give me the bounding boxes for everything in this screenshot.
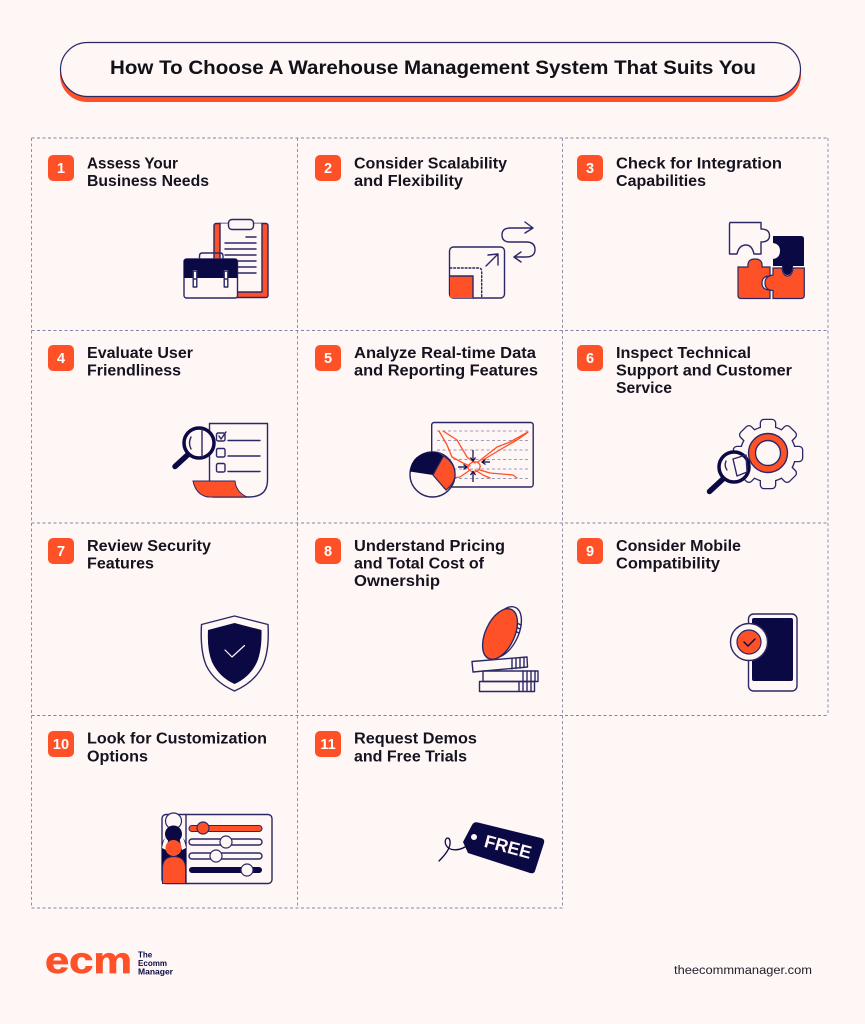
heading 6: Support and Customer [616,362,792,380]
heading 7: Features [87,556,154,572]
badge 3: 3 [586,161,594,177]
heading 5: and Reporting Features [354,362,538,380]
logo: the ecomm manager: Ecomm [138,959,167,968]
badge 7 [48,538,74,564]
icon: coin on books [472,601,538,692]
badge 9: 9 [586,544,594,560]
panel 3: check for integration capabilities [577,155,804,298]
heading 2: and Flexibility [354,173,463,190]
heading 5 [354,345,538,380]
panel 4: evaluate user friendliness [48,345,268,497]
panel 2: consider scalability and flexibility [315,155,535,298]
badge 8 [315,538,341,564]
heading 6: Service [616,380,672,397]
heading 6: Inspect Technical [616,345,751,362]
badge 6: 6 [586,351,594,367]
icon: sliders and user profiles [162,813,272,884]
heading 2: Consider Scalability [354,156,507,172]
badge 6 [577,345,603,371]
heading 10: Options [87,748,148,766]
badge 11 [315,731,341,757]
heading 6 [616,345,792,397]
badge 9 [577,538,603,564]
heading 8 [354,538,505,590]
icon: clipboard and briefcase [184,220,268,298]
badge 1 [48,155,74,181]
badge 7: 7 [57,544,65,560]
badge 5 [315,345,341,371]
panel 10: look for customization options [48,730,272,884]
heading 4: Friendliness [87,362,181,380]
heading 4: Evaluate User [87,345,193,362]
badge 5: 5 [324,351,332,367]
logo: the ecomm manager [45,940,173,981]
heading 5: Analyze Real-time Data [354,345,536,362]
title banner [60,42,801,102]
heading 11: and Free Trials [354,748,467,766]
heading 9 [616,538,741,572]
panel 9: consider mobile compatibility [577,538,797,691]
heading 4 [87,345,193,380]
heading 1: Business Needs [87,173,209,190]
badge 10: 10 [53,737,69,753]
panel 8: understand pricing [315,538,538,692]
badge 4 [48,345,74,371]
heading 1: Assess Your [87,156,178,172]
icon: free price tag [439,822,544,873]
title banner: How To Choose A Warehouse Management System That Suits You [110,57,756,79]
icon: gear with magnifier [710,420,802,492]
logo: the ecomm manager: ecm [45,940,132,981]
badge 2: 2 [324,161,332,177]
heading 3 [616,156,782,190]
heading 8: and Total Cost of [354,556,485,572]
panel 11: request demos and free trials [315,730,544,873]
heading 8: Understand Pricing [354,538,505,555]
icon: phone with check [730,614,797,691]
heading 7: Review Security [87,538,211,555]
heading 3: Check for Integration [616,156,782,172]
panel 5: analyze real-time data [315,345,538,497]
heading 10 [87,730,267,766]
heading 11: Request Demos [354,730,477,748]
badge 8: 8 [324,544,332,560]
icon: shield with check [201,616,268,691]
badge 4: 4 [57,351,65,367]
icon: scaling square with arrows [450,222,535,298]
heading 2 [354,156,507,190]
panel 1: assess your business needs [48,155,268,298]
panel 6: inspect technical support [577,345,802,492]
logo: the ecomm manager: The [138,950,153,960]
badge 2 [315,155,341,181]
panel 7: review security features [48,538,268,691]
heading 1 [87,156,209,190]
heading 11 [354,730,477,766]
heading 7 [87,538,211,572]
website url: theecommmanager.com [674,965,812,977]
icon: checklist with magnifier [175,424,268,497]
icon: puzzle pieces [730,222,804,298]
icon: data board and pie chart [410,422,533,497]
heading 8: Ownership [354,573,440,590]
badge 10 [48,731,74,757]
heading 3: Capabilities [616,173,706,190]
logo: the ecomm manager: Manager [138,967,173,976]
heading 10: Look for Customization [87,730,267,748]
badge 3 [577,155,603,181]
badge 11: 11 [320,737,336,753]
heading 9: Compatibility [616,556,720,572]
icon: free price tag: FREE [482,831,534,863]
badge 1: 1 [57,161,65,177]
heading 9: Consider Mobile [616,538,741,555]
